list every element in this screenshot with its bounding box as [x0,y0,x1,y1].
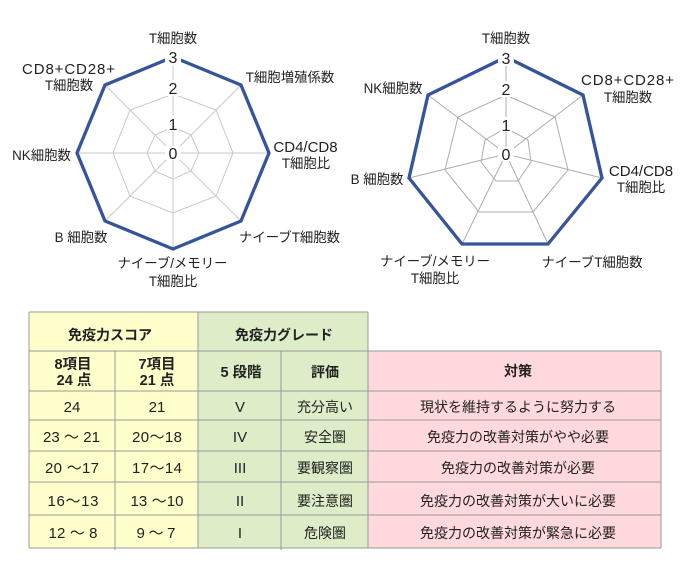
row: 24: V [235,399,245,416]
axis labels: 7 items: B 細胞数 [351,172,403,187]
row: 16-13: 要注意圏 [297,493,353,509]
axis labels: 7 items: T細胞比 [411,271,459,286]
score table [29,312,661,550]
column headers: 評価 [311,364,339,380]
axis labels: 8 items: T細胞増殖係数 [246,69,334,85]
axis labels: 8 items: T細胞比 [282,156,330,171]
heading: immune score: 免疫力スコア [68,327,152,343]
row: 16-13: 免疫力の改善対策が大いに必要 [420,493,616,509]
scale labels: 7 items: 0 [502,147,511,164]
axis labels: 7 items: ナイーブT細胞数 [541,254,643,270]
row: 12-8: 危険圏 [304,525,346,541]
row: 16-13: II [236,493,244,510]
panel: immune score [29,312,198,548]
row: 23-21 [43,429,609,446]
row: 16-13 [48,493,616,510]
axis labels: 7 items: NK細胞数 [364,81,422,96]
radar outline: 7 items [409,57,602,244]
column headers: 7項目 [138,356,176,373]
row: 24: 21 [149,399,165,416]
scale labels: 8 items: 2 [169,81,178,98]
axis labels: 8 items [12,31,340,289]
row: 20-17: III [234,460,246,477]
row: 23-21: IV [233,429,247,446]
axis labels: 8 items: T細胞数 [149,31,197,46]
radar chart: 7 items [351,31,674,286]
row: 20-17: 要観察圏 [297,460,353,476]
row: 12-8: I [238,525,242,542]
scale labels: 8 items: 1 [169,117,178,134]
column headers: 21 点 [140,371,175,389]
axis labels: 8 items: B 細胞数 [55,230,107,245]
axis labels: 7 items [351,31,674,286]
row: 20-17: 20 ～17 [45,460,99,477]
axis labels: 8 items: ナイーブ/メモリー [117,255,228,271]
axis labels: 7 items: T細胞数 [604,90,652,105]
row: 20-17: 17～14 [132,460,182,477]
axis labels: 8 items: CD4/CD8 [273,139,338,156]
row: 12-8: 9 ～ 7 [136,525,176,542]
scale labels: 8 items [165,49,181,163]
axis labels: 8 items: T細胞比 [149,274,197,289]
axis labels: 7 items: T細胞比 [617,180,665,195]
row: 24: 現状を維持するように努力する [420,399,616,415]
axis labels: 8 items: NK細胞数 [12,148,71,163]
row: 12-8 [48,525,616,542]
radar outline: 8 items [77,57,269,249]
row: 24 [64,399,616,416]
radar grid: 7 items [409,57,602,244]
column headers [54,356,532,389]
panel: immune grade [198,312,368,548]
column headers: 24 点 [57,371,92,389]
row: 23-21: 20～18 [132,429,182,446]
row: 24: 24 [64,399,80,416]
column headers: 対策 [504,363,532,379]
axis labels: 7 items: CD4/CD8 [609,163,673,180]
row: 24: 充分高い [297,399,353,415]
table grid lines [29,312,661,550]
scale labels: 7 items [498,49,514,164]
axis labels: 8 items: CD8+CD28+ [22,61,115,78]
axis labels: 8 items: T細胞数 [45,78,93,93]
radar chart: 8 items [12,31,340,289]
axis labels: 7 items: ナイーブ/メモリー [380,253,490,269]
row: 16-13: 13 ～10 [130,493,184,510]
scale labels: 8 items: 0 [169,146,178,163]
column headers: 5 段階 [220,363,262,381]
axis labels: 7 items: T細胞数 [482,31,530,46]
scale labels: 7 items: 1 [502,118,511,135]
row: 23-21: 免疫力の改善対策がやや必要 [427,429,609,445]
scale labels: 7 items: 3 [502,51,511,68]
panel: countermeasures [368,351,661,548]
row: 23-21: 23 ～ 21 [43,429,100,446]
row: 12-8: 免疫力の改善対策が緊急に必要 [420,525,616,541]
axis labels: 7 items: CD8+CD28+ [581,72,674,89]
row: 12-8: 12 ～ 8 [48,525,98,542]
row: 20-17: 免疫力の改善対策が必要 [441,460,595,476]
column headers: 8項目 [54,356,92,373]
row: 20-17 [45,460,595,477]
scale labels: 8 items: 3 [169,50,178,67]
scale labels: 7 items: 2 [502,82,511,99]
row: 23-21: 安全圏 [304,429,346,445]
row: 16-13: 16～13 [48,493,98,510]
axis labels: 8 items: ナイーブT細胞数 [239,229,340,245]
radar grid: 8 items [77,57,269,249]
heading: immune grade: 免疫力グレード [235,327,333,343]
